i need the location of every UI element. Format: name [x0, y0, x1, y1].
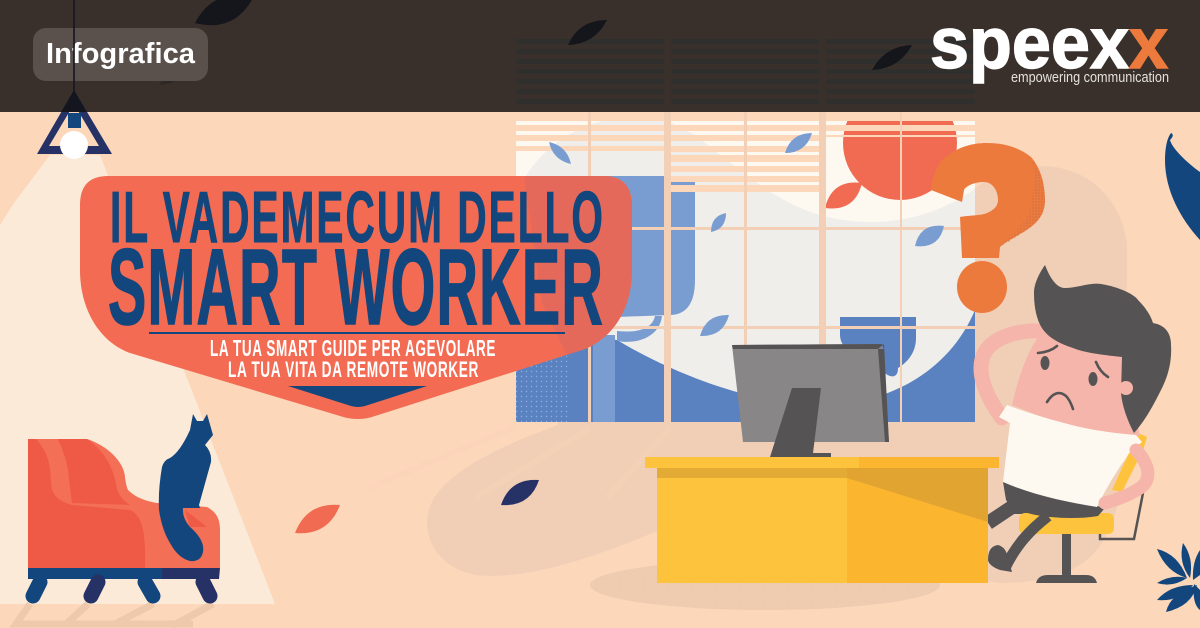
moon blob — [526, 121, 975, 394]
armchair base — [28, 568, 162, 579]
shoe — [988, 545, 1012, 572]
badge: Infografica: Infografica — [46, 38, 196, 70]
lower arm — [1105, 450, 1148, 503]
subtitle: LA TUA SMART GUIDE PER AGEVOLARE — [210, 335, 496, 361]
faint leaf in header — [159, 63, 192, 85]
title banner — [80, 170, 640, 419]
divider rule — [149, 332, 565, 334]
background blob — [427, 117, 1127, 583]
logo: speexx: speexx — [930, 4, 1168, 84]
plant at bottom right — [1157, 543, 1200, 612]
falling coral leaf — [295, 505, 340, 533]
trousers — [1003, 482, 1105, 518]
face — [1012, 328, 1140, 436]
chair seat — [1019, 513, 1114, 534]
blinds seen through header — [516, 39, 975, 104]
mug handle — [617, 316, 662, 342]
question mark — [931, 143, 1045, 313]
blue leaf at right edge — [1165, 133, 1200, 240]
raised arm — [981, 331, 1040, 418]
floor light reflections — [368, 428, 670, 498]
large blue mug — [608, 176, 695, 317]
mouth — [1047, 393, 1073, 409]
title line 1: IL VADEMECUM DELLO — [110, 177, 605, 258]
header bar — [0, 0, 1200, 112]
blue sky lower part — [516, 310, 975, 422]
sofa floor shadow — [16, 604, 213, 626]
lamp light beam — [0, 155, 275, 604]
window — [516, 112, 975, 422]
eyes — [1040, 356, 1050, 370]
shirt — [999, 405, 1142, 507]
chair back — [1112, 433, 1147, 492]
small blue mug — [840, 317, 916, 376]
monitor — [732, 344, 889, 457]
armchair — [28, 439, 220, 596]
hair — [1034, 265, 1171, 433]
title line 2: SMART WORKER — [108, 227, 604, 347]
hanging lamp — [37, 0, 112, 159]
chair frame — [1100, 493, 1143, 539]
window frame bars — [588, 112, 975, 422]
worried man at chair — [981, 265, 1171, 583]
falling blue leaves — [549, 133, 944, 336]
near leg — [1005, 516, 1048, 568]
eyebrows — [1038, 346, 1108, 377]
title banner: LA TUA VITA DA REMOTE WORKER — [228, 357, 479, 382]
falling navy leaf — [501, 480, 539, 505]
desk — [645, 457, 999, 583]
stippled sky — [516, 356, 571, 422]
cat — [159, 414, 213, 561]
floor shadow under desk — [590, 560, 940, 610]
sun — [843, 121, 957, 200]
chair foot — [1036, 575, 1097, 583]
dark falling leaves in header — [195, 0, 912, 70]
badge: Infografica — [33, 28, 208, 81]
banner arrow — [288, 386, 427, 407]
ear — [1119, 381, 1133, 395]
armchair legs — [33, 582, 210, 596]
light column — [593, 335, 615, 422]
blinds — [516, 112, 975, 192]
chair post — [1062, 533, 1071, 577]
logo: speexx: empowering communication — [1011, 70, 1169, 86]
sun leaf — [825, 183, 862, 208]
far leg — [988, 507, 1040, 523]
